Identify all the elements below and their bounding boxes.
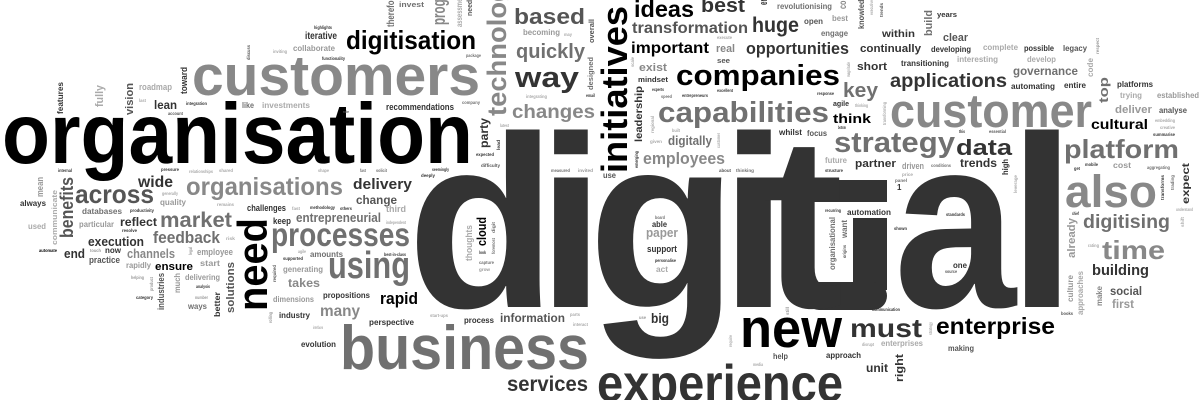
small words: bottom left: methodology — [310, 205, 335, 210]
small words: top right: deliver — [1115, 104, 1153, 116]
small words: right edge: culture — [1066, 274, 1075, 302]
small words: top left: last — [139, 98, 146, 103]
small words: right edge: already — [1066, 217, 1078, 258]
small words: right edge: partner — [855, 158, 897, 170]
small words: top centre: deeply — [421, 173, 435, 178]
small words: right edge: trends — [960, 158, 997, 170]
small words: right edge: panel — [895, 178, 907, 183]
small words: top right: developing — [931, 44, 971, 54]
small words: bottom centre: interact — [573, 322, 588, 327]
small words: bottom left: generating — [283, 264, 323, 274]
small words: bottom left: industries — [156, 273, 166, 310]
small words: bottom left: always — [20, 199, 47, 208]
small words: top centre: important — [631, 40, 710, 57]
small words: right edge: approaches — [1076, 270, 1085, 315]
small words: bottom left: touch — [90, 248, 101, 253]
small words: top right: automating — [1011, 82, 1055, 91]
small words: top right: response — [817, 91, 834, 96]
small words: bottom centre: approach — [826, 350, 861, 360]
small words: top right: interesting — [957, 55, 998, 64]
small words: top centre: thinking — [736, 168, 754, 173]
small words: inside the letter counters: source — [945, 269, 957, 274]
small words: top left: iterative — [305, 31, 337, 42]
word: time: time — [1102, 235, 1165, 265]
small words: top centre: lead — [496, 140, 501, 150]
small words: inside the letter counters: foremost — [491, 238, 496, 254]
word: strategy: strategy — [834, 127, 955, 159]
small words: top centre — [399, 0, 849, 180]
small words: top centre: seemingly — [432, 167, 449, 172]
small words: right edge: structure — [825, 168, 843, 173]
small words: top right: bottom — [838, 125, 846, 130]
small words: top centre: invest — [399, 0, 425, 9]
small words: bottom centre: right — [894, 354, 906, 382]
small words: top left: lean — [154, 98, 177, 112]
small words: top centre: about — [719, 168, 731, 173]
small words: bottom left: execution — [88, 234, 144, 249]
small words: bottom left: industry — [279, 310, 310, 320]
small words: top left: like — [242, 101, 254, 110]
small words: inside the letter counters: origins — [842, 245, 847, 258]
small words: top right: trends — [879, 3, 884, 17]
small words: right edge: driven — [902, 161, 924, 171]
small words: top right: embedding — [1155, 118, 1175, 123]
small words: bottom centre: communication — [872, 307, 900, 312]
small words: right edge: get — [1074, 166, 1080, 171]
word: digital: a — [894, 85, 1018, 359]
small words: bottom left: third — [386, 204, 406, 214]
small words: right edge — [825, 156, 1193, 316]
small words: top centre: may — [564, 32, 572, 37]
small words: top left: pressure — [161, 167, 179, 172]
word: digitisation: digitisation — [346, 25, 476, 55]
small words: bottom left: resolve — [122, 228, 137, 233]
small words: top centre: measured — [551, 168, 570, 173]
small words: bottom left: ensure — [155, 261, 193, 273]
small words: top right: top — [1096, 77, 1111, 103]
small words: bottom centre: making — [948, 343, 974, 353]
small words: top centre: use — [603, 171, 617, 180]
small words: top right: cultural — [1091, 116, 1148, 132]
word: also: also — [1065, 166, 1157, 217]
small words: bottom left: reflect — [120, 215, 157, 229]
small words: top centre: experts — [652, 87, 664, 92]
small words: top left: mean — [35, 177, 45, 197]
small words: bottom left: rapid — [380, 289, 418, 308]
small words: top centre: party — [477, 118, 491, 148]
small words: right edge: trading — [1170, 175, 1175, 190]
small words: right edge: leverage — [1013, 175, 1018, 193]
small words: top centre: designed — [586, 57, 595, 90]
small words: top centre: digitally — [668, 133, 713, 148]
small words: top left: fully — [94, 84, 106, 107]
word: digital — [407, 85, 1076, 359]
small words: bottom centre: enterprises — [881, 338, 923, 348]
small words: bottom left: propositions — [323, 290, 370, 300]
small words: inside the letter counters: want — [840, 220, 849, 239]
small words: top centre: opportunities — [746, 39, 849, 58]
small words: bottom left: amounts — [310, 250, 344, 259]
small words: top centre: integrating — [526, 94, 547, 99]
word: data: data — [956, 135, 1013, 160]
small words: bottom left: dimensions — [273, 294, 314, 304]
word: must: must — [850, 313, 922, 343]
word: need: need — [229, 218, 276, 311]
small words: top centre: email — [586, 93, 595, 98]
small words: top right: possible — [1024, 44, 1055, 53]
small words: bottom left: rapidly — [126, 261, 152, 270]
small words: top left: inviting — [273, 49, 287, 54]
small words: right edge: rating — [1088, 243, 1099, 248]
small words: top right: think — [833, 111, 872, 126]
small words: top right: legacy — [1063, 44, 1088, 53]
small words: top left: fast — [360, 168, 366, 173]
small words: top right: thinking — [855, 103, 868, 108]
word: new: new — [740, 297, 842, 359]
small words: top centre: becoming — [523, 28, 560, 37]
small words: top right: clear — [943, 32, 969, 44]
small words: top centre: based — [514, 4, 585, 29]
small words: bottom centre — [430, 307, 974, 382]
small words: top centre: scale — [630, 57, 635, 67]
small words: bottom left: automate — [39, 248, 57, 253]
small words: top right: trying — [1120, 91, 1142, 100]
small words: bottom left: quality — [160, 198, 187, 207]
small words: inside the letter counters: recurring — [825, 208, 841, 213]
small words: bottom centre: process — [464, 315, 494, 325]
small words: inside the letter counters: shown — [894, 226, 907, 231]
small words: top right: essential — [989, 129, 1006, 134]
small words: bottom left: required — [272, 265, 277, 282]
word: customers: customers — [192, 44, 480, 108]
small words: right edge: price — [902, 172, 913, 177]
word: enterprise: enterprise — [936, 313, 1055, 339]
small words: top centre: revolutionising — [777, 1, 832, 11]
small words: bottom left: legal — [188, 247, 193, 255]
small words: top left: features — [56, 81, 65, 114]
small words: inside the letter counters: board — [655, 215, 665, 220]
small words: bottom centre: strategy — [928, 322, 933, 335]
small words: inside the letter counters: big — [651, 310, 669, 326]
small words: inside the letter counters: use — [639, 315, 646, 320]
word: digital: g — [588, 85, 738, 359]
small words: top right: respect — [1095, 38, 1100, 54]
word: digitising: digitising — [1083, 212, 1170, 233]
small words: top left: relationships — [189, 169, 213, 174]
word: way: way — [514, 62, 579, 94]
small words: top centre: mindset — [638, 75, 669, 84]
small words: bottom left: productivity — [130, 208, 154, 213]
small words: top right: best — [832, 14, 848, 23]
word: applications: applications — [890, 71, 1007, 92]
small words: top right: complete — [983, 43, 1019, 52]
small words: inside the letter counters: personalise — [655, 258, 676, 263]
small words: inside the letter counters: grow — [479, 267, 491, 272]
word: companies: companies — [676, 60, 840, 92]
small words: top right: open — [804, 17, 823, 26]
small words: inside the letter counters — [464, 207, 968, 326]
small words: top centre: customer — [716, 133, 721, 148]
small words: top right — [804, 0, 1199, 137]
small words: top centre: package — [466, 53, 481, 58]
small words: inside the letter counters: support — [647, 244, 677, 254]
small words: bottom left: much — [173, 273, 182, 293]
small words: top centre: quickly — [516, 41, 586, 63]
small words: inside the letter counters: organisational — [828, 217, 837, 270]
small words: top left: solicit — [376, 168, 387, 173]
small words: top left: vision — [124, 83, 136, 115]
small words: top right: code — [1086, 57, 1095, 77]
small words: bottom left: now — [105, 246, 122, 255]
small words: bottom left: risk — [226, 236, 236, 241]
small words: inside the letter counters: thoughts — [464, 225, 474, 261]
word: initiatives: initiatives — [594, 6, 635, 173]
small words: bottom left: category — [136, 295, 153, 300]
small words: bottom left: delivering — [185, 273, 220, 282]
small words: bottom left: better — [213, 292, 222, 317]
small words: bottom left: end — [64, 246, 85, 261]
small words: top left: investments — [262, 100, 310, 110]
small words: bottom centre: media — [753, 362, 763, 367]
small words: bottom left: ways — [187, 301, 207, 311]
word: digital: i — [720, 85, 788, 359]
small words: top centre: exist — [639, 62, 667, 74]
small words: right edge: first — [1112, 297, 1134, 311]
small words: top right: key — [843, 80, 879, 102]
small words: top left: delivery — [353, 176, 413, 193]
small words: top centre: latest — [500, 123, 509, 128]
small words: bottom centre: still — [785, 307, 790, 315]
small words: top centre: entrepreneurs — [682, 93, 708, 98]
small words: right edge: make — [1095, 285, 1104, 306]
small words: bottom left: agile — [298, 249, 306, 254]
small words: bottom centre: unit — [866, 361, 888, 375]
small words: right edge: expect — [1181, 162, 1192, 204]
small words: right edge: future — [825, 156, 848, 165]
small words: bottom left: best-in-class — [384, 252, 406, 257]
small words: right edge: building — [1092, 262, 1149, 279]
small words: top centre: company — [462, 100, 480, 105]
small words: top centre: transformation — [632, 20, 748, 37]
word: services: services — [507, 373, 588, 396]
small words: top right: entire — [1064, 81, 1087, 90]
small words: top left: integration — [186, 101, 207, 106]
word: across: across — [75, 179, 154, 209]
small words: top left: generally — [162, 191, 178, 196]
small words: top right: established — [1157, 91, 1199, 100]
small words: top left: benefits — [57, 177, 77, 238]
word: using: using — [328, 245, 410, 287]
small words: right edge: aggregating — [1147, 165, 1170, 170]
small words: bottom left: databases — [82, 206, 122, 216]
small words: top centre: emerging — [634, 151, 639, 168]
small words: bottom left: product — [149, 277, 154, 291]
word: processes: processes — [271, 216, 410, 253]
small words: top centre: huge — [752, 14, 799, 37]
small words: inside the letter counters: standards — [946, 212, 965, 217]
small words: top left: communicate — [50, 190, 59, 245]
small words: top right: build — [923, 10, 935, 36]
small words: bottom left: practice — [89, 255, 120, 265]
small words: top right: governance — [1013, 66, 1078, 78]
small words: top right: analyse — [1159, 105, 1187, 115]
small words: bottom left: feedback — [153, 228, 220, 247]
small words: top centre: regional — [650, 116, 655, 133]
small words: top right: short — [857, 61, 887, 73]
small words: top right: transitioning — [901, 59, 949, 68]
small words: bottom left: entrepreneurial — [296, 210, 381, 225]
small words: top left: discuss — [246, 45, 251, 60]
small words: bottom left: interfaces — [313, 325, 323, 330]
small words: top centre: changes — [512, 102, 595, 123]
small words: bottom left: fast — [292, 206, 300, 211]
small words: right edge: mobile — [1085, 162, 1098, 167]
small words: top right: years — [937, 10, 957, 19]
small words: bottom left: channels — [127, 246, 175, 261]
small words: top right: this — [959, 129, 965, 134]
small words: top right: platforms — [1117, 80, 1154, 89]
small words: bottom left: many — [320, 303, 360, 320]
small words: inside the letter counters: look — [479, 250, 486, 255]
small words: top left: toward — [179, 67, 189, 94]
small words: right edge: understand — [1176, 207, 1193, 212]
small words: top centre: excellent — [717, 88, 733, 93]
small words: top right: develop — [1027, 55, 1056, 64]
small words: right edge: social — [1110, 284, 1142, 298]
small words: top centre: speed — [661, 94, 672, 99]
small words: right edge: high — [1001, 159, 1010, 175]
small words: top left: roadmap — [139, 82, 172, 92]
small words: bottom left: takes — [288, 276, 320, 290]
small words: bottom centre: information — [500, 311, 565, 325]
small words: top left: internal — [58, 168, 72, 173]
small words: top left — [35, 0, 454, 245]
small words: top left: shared — [219, 168, 233, 173]
word: business: business — [340, 314, 589, 383]
small words: bottom left: challenges — [247, 203, 286, 214]
small words: top centre: see — [717, 58, 730, 65]
small words: top centre: employees — [643, 149, 725, 168]
small words: top left: wide — [137, 174, 173, 191]
small words: top left: role — [343, 109, 350, 114]
small words: bottom left: others — [340, 206, 352, 211]
small words: right edge: books — [1061, 311, 1073, 316]
small words: right edge: transforms — [1160, 174, 1165, 200]
small words: right edge: cost — [1113, 161, 1131, 170]
small words: bottom left: remains — [217, 202, 234, 207]
small words: top centre: expected — [476, 152, 494, 157]
small words: bottom left: independent — [386, 220, 406, 225]
small words: bottom left: used — [28, 222, 46, 231]
small words: top right: within — [881, 28, 915, 40]
small words: bottom left: supported — [283, 256, 303, 261]
small words: top centre: leadership — [634, 86, 645, 142]
small words: top right: magnitude — [846, 62, 851, 77]
small words: top right: summarise — [1153, 132, 1175, 137]
small words: top right: engage — [821, 29, 849, 38]
small words: top right: agile — [833, 99, 849, 108]
word: digital: l — [1008, 85, 1076, 359]
small words: bottom centre: start-ups — [430, 313, 448, 318]
small words: inside the letter counters: automation — [847, 207, 891, 217]
small words: top centre: given — [650, 139, 662, 144]
small words: inside the letter counters: paper — [646, 225, 678, 240]
small words: inside the letter counters: cloud — [474, 217, 489, 246]
small words: inside the letter counters: act — [656, 264, 668, 274]
small words: right edge: conditions — [931, 163, 951, 168]
small words: top left: functionality — [322, 56, 345, 61]
word: digital: t — [762, 85, 844, 359]
word: digital: d — [407, 85, 557, 359]
small words: inside the letter counters: one — [953, 261, 968, 270]
word: customer: customer — [890, 84, 1092, 137]
word: organisations: organisations — [186, 173, 343, 201]
small words: bottom left: change — [356, 193, 397, 207]
small words: bottom left: evolution — [301, 340, 336, 349]
small words: inside the letter counters: capture — [479, 260, 494, 265]
small words: right edge: chief — [1072, 211, 1079, 216]
small words: top centre: whilst — [778, 128, 802, 137]
small words: bottom centre: help — [773, 352, 788, 361]
word: capabilities: capabilities — [658, 97, 829, 129]
small words: bottom left: perspective — [369, 317, 414, 327]
small words: top centre: real — [716, 43, 735, 55]
word: organisation: organisation — [2, 87, 473, 182]
small words: top left: recommendations — [386, 102, 454, 112]
word: market: market — [160, 209, 232, 232]
small words: top centre: difficulty — [481, 163, 501, 168]
word: digital: i — [537, 85, 605, 359]
small words: bottom left: helping — [131, 275, 144, 280]
small words: top centre: overall — [589, 19, 596, 43]
small words: inside the letter counters: able — [652, 219, 667, 229]
small words: top left: shape — [318, 168, 329, 173]
small words: top centre: execute — [717, 35, 732, 40]
small words: bottom left: start — [200, 259, 220, 268]
small words: top left: highlights — [314, 25, 332, 30]
small words: bottom left: particular — [79, 219, 115, 229]
small words: bottom left: keep — [273, 216, 291, 226]
small words: bottom centre: require — [728, 335, 733, 347]
small words: bottom centre: parts — [570, 312, 580, 317]
small words: bottom left: number — [195, 295, 208, 300]
small words: top centre: focus — [807, 128, 827, 138]
small words: top centre: invited — [578, 168, 593, 173]
small words: inside the letter counters: digit — [491, 221, 496, 233]
small words: top centre: built — [672, 128, 680, 133]
word: platform: platform — [1064, 134, 1179, 164]
small words: top left: collaborate — [293, 43, 335, 53]
small words: top right: creative — [1160, 125, 1175, 130]
small words: right edge: shift — [1180, 216, 1185, 227]
small words: bottom centre: disrupt — [862, 342, 874, 347]
small words: right edge: 1 — [897, 183, 902, 192]
small words: top left: account — [168, 111, 183, 116]
small words: bottom left: rolling — [268, 312, 273, 323]
small words: top right: transforming — [882, 102, 887, 125]
small words: bottom left: solutions — [225, 262, 237, 313]
small words: bottom left: employee — [197, 247, 233, 257]
small words: bottom left — [20, 193, 418, 349]
small words: top right: continually — [860, 43, 922, 55]
small words: bottom left: analysis — [196, 284, 210, 289]
